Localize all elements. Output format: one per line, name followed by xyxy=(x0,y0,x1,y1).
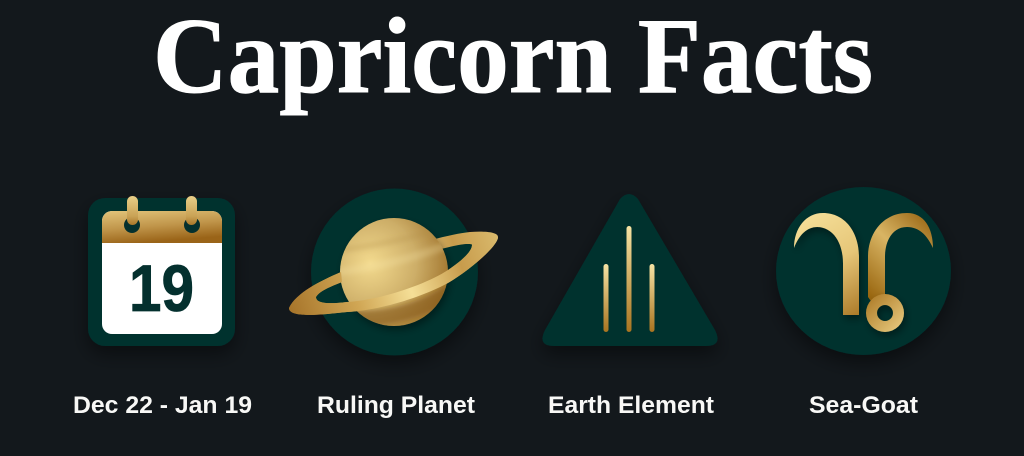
label: earth element: Earth Element xyxy=(548,392,714,419)
triangle shape xyxy=(542,194,718,346)
glyph right horn xyxy=(868,213,933,304)
calendar gold header xyxy=(102,211,222,243)
title: Capricorn Facts xyxy=(153,0,873,116)
label: ruling planet: Ruling Planet xyxy=(317,392,475,419)
triangle gold bars xyxy=(604,226,654,332)
calendar backing tile xyxy=(88,198,235,346)
glyph left horn xyxy=(794,213,859,315)
calendar binding holes xyxy=(124,217,200,233)
label: sea-goat: Sea-Goat xyxy=(809,392,918,419)
icon: ringed planet xyxy=(289,188,498,356)
icon: earth element triangle xyxy=(542,194,718,346)
calendar rings xyxy=(127,196,197,225)
label: date range: Dec 22 - Jan 19 xyxy=(73,392,252,419)
planet full ring xyxy=(289,232,498,315)
planet backing circle xyxy=(311,188,478,356)
planet front ring xyxy=(289,237,498,315)
planet bands xyxy=(340,238,446,326)
glyph loop xyxy=(866,294,904,332)
icon: calendar xyxy=(88,196,235,346)
planet sphere xyxy=(340,218,448,326)
calendar page xyxy=(102,211,222,334)
glyph backing circle xyxy=(776,187,951,355)
infographic canvas xyxy=(74,16,951,418)
icon: sea-goat glyph xyxy=(776,187,951,355)
calendar date: 19 xyxy=(129,251,194,325)
